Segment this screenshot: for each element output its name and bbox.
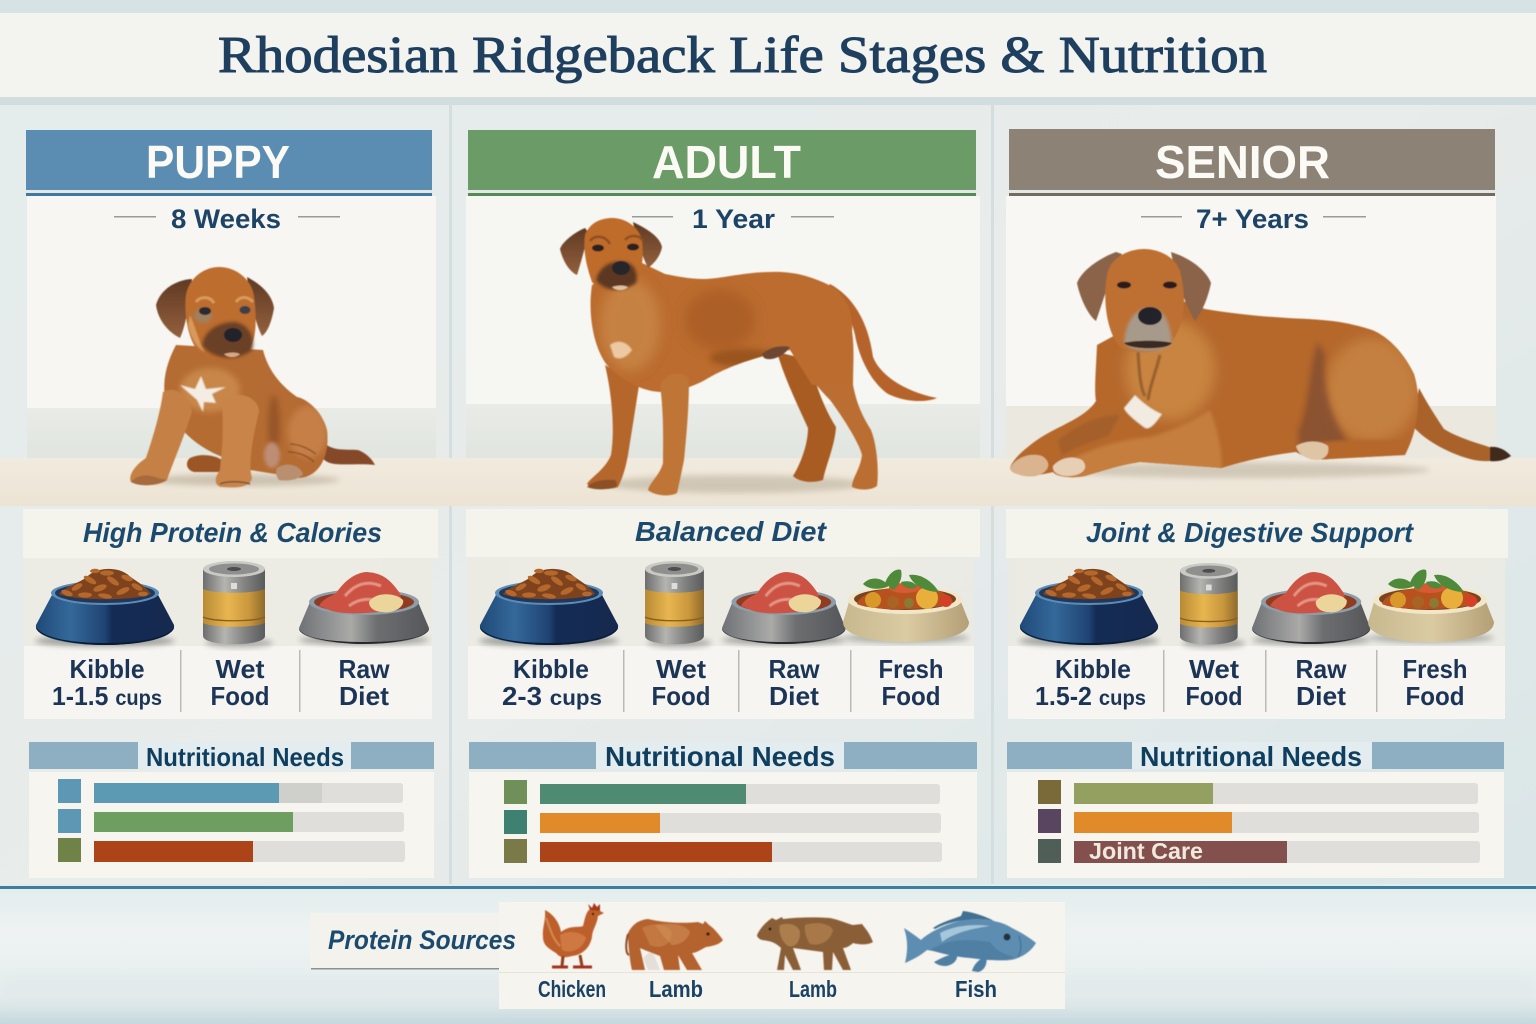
panel: senior food labels: 1.5-2 cups bbox=[1035, 681, 1146, 711]
icon: puppy raw diet bowl bbox=[299, 572, 429, 645]
protein labels: Chicken bbox=[538, 976, 606, 1002]
panel: senior photo backdrop bbox=[1006, 196, 1496, 458]
panel: senior header: SENIOR bbox=[1155, 136, 1330, 188]
panel: senior food labels: Food bbox=[1406, 681, 1464, 711]
panel: puppy diet heading: High Protein & Calories bbox=[83, 517, 382, 548]
panel: adult diet heading bbox=[466, 509, 980, 557]
adult bar chart bbox=[504, 780, 942, 863]
panel: puppy photo backdrop bbox=[27, 196, 436, 460]
icon: puppy wet food can bbox=[203, 561, 273, 648]
icon: senior raw diet bowl bbox=[1252, 572, 1370, 645]
protein labels: Lamb bbox=[649, 976, 703, 1002]
panel: adult food labels: Fresh bbox=[878, 654, 944, 684]
panel: puppy header bbox=[26, 130, 432, 196]
puppy bar chart bbox=[58, 779, 405, 862]
age label: 1 year: 1 Year bbox=[692, 204, 776, 234]
panel: senior food labels: Fresh bbox=[1402, 654, 1468, 684]
panel: adult nutritional needs: Nutritional Needs bbox=[605, 741, 835, 772]
icon: adult kibble bowl bbox=[479, 569, 619, 647]
panel: puppy nutritional needs bbox=[29, 742, 434, 878]
panel: puppy nutritional needs: Nutritional Needs bbox=[146, 742, 344, 772]
column dividers bbox=[449, 105, 994, 885]
puppy dog illustration bbox=[130, 267, 375, 487]
panel: senior diet heading bbox=[1006, 509, 1508, 558]
panel: adult food labels: 2-3 cups bbox=[502, 681, 602, 711]
panel: adult food labels: Food bbox=[652, 681, 710, 711]
title banner bbox=[0, 0, 1536, 105]
icon: adult wet food can bbox=[645, 561, 712, 648]
floor band bbox=[0, 458, 1536, 506]
panel: adult header: ADULT bbox=[652, 136, 801, 188]
age label: 7+ years: 7+ Years bbox=[1196, 204, 1309, 234]
senior bar chart: Joint Care bbox=[1089, 838, 1203, 864]
panel: adult photo backdrop bbox=[466, 196, 980, 460]
panel: adult food labels: Wet bbox=[656, 654, 706, 684]
icon: adult fresh food bowl bbox=[843, 570, 969, 643]
panel: puppy diet heading bbox=[23, 509, 438, 558]
icon: cattle one bbox=[626, 919, 723, 970]
icon: senior fresh food bowl bbox=[1368, 570, 1494, 643]
bottom band bbox=[0, 884, 1536, 1024]
panel: adult food labels: Kibble bbox=[513, 654, 589, 684]
panel: senior food labels: Diet bbox=[1296, 681, 1346, 711]
panel: puppy header: PUPPY bbox=[146, 136, 290, 188]
panel: puppy food labels: Diet bbox=[339, 681, 389, 711]
panel: puppy food labels: Food bbox=[210, 681, 270, 711]
title: Rhodesian Ridgeback Life Stages & Nutrition bbox=[218, 27, 1267, 84]
panel: puppy food labels: 1-1.5 cups bbox=[52, 681, 162, 711]
panel: senior food labels: Raw bbox=[1296, 654, 1347, 684]
icon: puppy kibble bowl bbox=[35, 569, 175, 647]
panel: senior food labels: Kibble bbox=[1055, 654, 1131, 684]
panel: puppy food labels: Kibble bbox=[70, 654, 144, 684]
icon: senior wet food can bbox=[1180, 563, 1245, 648]
panel: senior nutritional needs bbox=[1007, 741, 1504, 878]
panel: puppy food labels bbox=[24, 646, 432, 719]
panel: adult header bbox=[468, 130, 976, 196]
senior dog illustration bbox=[1010, 249, 1511, 480]
panel: puppy food labels: Wet bbox=[216, 654, 265, 684]
panel: puppy food labels: Raw bbox=[338, 654, 390, 684]
panel: adult food labels bbox=[468, 646, 974, 719]
protein labels: Lamb bbox=[789, 976, 837, 1002]
senior bar chart bbox=[1038, 780, 1480, 864]
panel: senior food labels bbox=[1008, 646, 1505, 719]
protein labels: Fish bbox=[955, 976, 997, 1002]
adult dog illustration bbox=[560, 218, 937, 495]
panel: adult food labels: Food bbox=[882, 681, 940, 711]
icon: fish bbox=[904, 911, 1036, 972]
icon: cattle two bbox=[757, 917, 873, 970]
icon: adult raw diet bowl bbox=[722, 572, 846, 645]
icon: chicken bbox=[543, 903, 604, 967]
panel: senior food labels: Wet bbox=[1189, 654, 1239, 684]
panel: senior food labels: Food bbox=[1186, 681, 1242, 711]
panel: senior header bbox=[1009, 129, 1495, 196]
panel: adult food labels: Raw bbox=[768, 654, 820, 684]
panel: adult nutritional needs bbox=[469, 741, 977, 878]
protein labels bbox=[538, 976, 997, 1002]
icon: senior kibble bowl bbox=[1019, 569, 1159, 647]
panel: adult diet heading: Balanced Diet bbox=[635, 516, 828, 547]
food backdrop panels bbox=[24, 558, 1505, 648]
panel: adult food labels: Diet bbox=[769, 681, 819, 711]
age label: 8 weeks: 8 Weeks bbox=[171, 204, 281, 234]
panel: protein sources bbox=[310, 902, 1065, 1009]
panel: senior diet heading: Joint & Digestive Support bbox=[1086, 517, 1415, 548]
panel: senior nutritional needs: Nutritional Needs bbox=[1140, 741, 1362, 772]
protein sources heading: Protein Sources bbox=[328, 925, 516, 955]
